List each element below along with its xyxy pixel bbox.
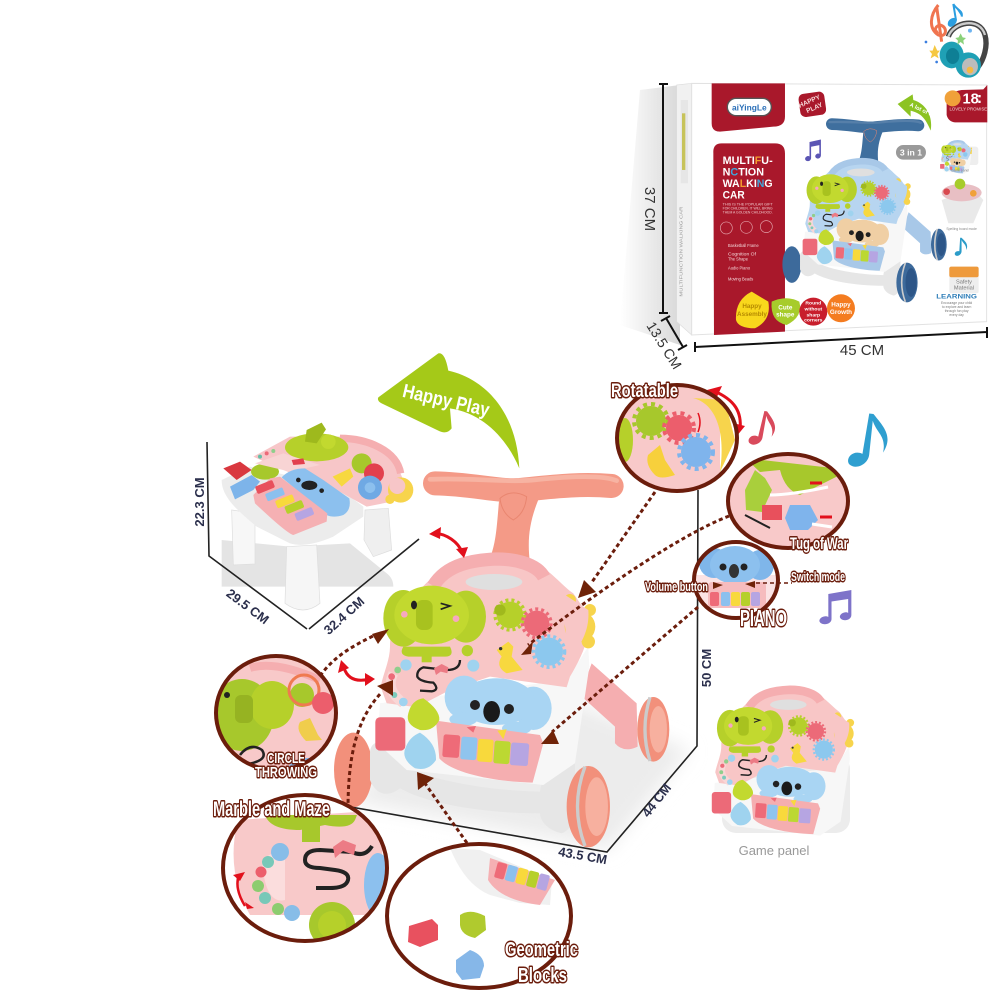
box game panel thumbnail: Game panel [951,168,969,172]
product box [677,83,987,335]
label: 22.3 CM: 22.3 CM [192,477,207,527]
box safety badge: Material [954,286,974,292]
box table thumbnail [942,179,983,231]
box badges [736,292,855,328]
box red top panel [712,83,785,132]
box age badge: LOVELY PROMISE [949,107,987,112]
box red side panel [713,143,785,335]
box logo: aiYingLe [732,104,767,113]
box happy play tag: HAPPY [798,94,822,110]
label: 37 CM: 37 CM [641,187,658,231]
icon: red music note [748,409,778,448]
label: Switch mode: Switch mode [791,569,845,584]
label: Rotatable: Rotatable [611,381,678,402]
box happy play tag: PLAY [805,101,824,115]
box dimension lines [659,84,987,352]
box small copy: FOR CHILDREN. IT WILL BRING [723,205,773,210]
box badges: Round [805,301,821,307]
box badges: corners [804,318,823,324]
box age badge [945,85,987,122]
label: Geometric Blocks: Geometric [505,939,578,961]
play table [222,423,413,610]
detail circle: tug of war [726,452,850,550]
box feature list: Moving Beads [728,277,753,282]
box happy play tag [798,91,827,118]
box learning text: every day [949,313,964,317]
icon: blue music note [847,412,890,470]
label: 29.5 CM: 29.5 CM [224,586,272,627]
box badges: Happy [742,303,762,310]
happy play green arrow: Happy Play [401,381,492,421]
arrowheads [372,580,596,790]
label: CIRCLE THROWING: THROWING [255,764,317,781]
box title: CAR [723,190,745,202]
label: CIRCLE THROWING [255,750,317,781]
label: CIRCLE THROWING: CIRCLE [267,750,305,767]
detail circle: geometric blocks [385,843,575,993]
box feature icons [720,221,772,234]
box feature list: The Shape [728,256,749,261]
box feature list: Basketball Frame [728,243,759,248]
volume and switch pointers [713,581,792,589]
box title: MULTIFU- [723,155,773,167]
box safety badge: Safety [956,280,972,286]
dashed leader lines [320,492,729,843]
detail circle: piano [690,540,785,620]
table dimension lines [207,442,419,629]
happy play green arrow [378,353,519,468]
box age badge: 18 [962,91,979,107]
box badges: Cute [778,304,793,311]
box learning text: to explore and learn [942,305,971,309]
music headphones icon [925,4,986,78]
box blue note [955,238,967,256]
box badges: Happy [831,302,851,309]
label: 13.5 CM: 13.5 CM [643,319,685,372]
label: Tug of War: Tug of War [790,534,848,553]
label: 32.4 CM: 32.4 CM [321,594,367,638]
box learning text: LEARNING [936,294,977,301]
label: 45 CM: 45 CM [840,342,884,359]
box table thumbnail: Spelling board mode [946,227,977,231]
box 3 in 1 badge: 3 in 1 [900,147,922,157]
box feature list: Cognition Of [728,252,757,257]
box title [723,155,773,202]
icon: purple music note [819,590,851,624]
detail circle: rotatable [615,383,739,493]
box feature list: Audio Piano [728,265,751,270]
box title: WALKING [723,178,773,190]
box badges: Growth [830,309,852,316]
box learning text [936,294,977,317]
box safety badge [949,267,979,293]
game panel inset [712,689,854,836]
box green arrow [898,94,938,131]
product box: MULTIFUNCTION WALKING CAR [679,207,684,297]
box logo [727,98,771,116]
label: Marble and Maze: Marble and Maze [213,798,330,821]
detail circle: marble and maze [220,790,392,948]
label: 43.5 CM: 43.5 CM [557,844,608,867]
label: Geometric Blocks [505,939,578,987]
box learning text: through fun play [945,309,969,313]
box 3 in 1 badge [896,145,926,160]
box small copy [723,201,773,214]
label: 44 CM: 44 CM [639,781,674,820]
box feature list [728,243,759,282]
walker dimension lines [345,490,698,852]
caption: Game panel: Game panel [739,843,810,858]
box green arrow: A lot of fun [908,102,938,121]
label: 50 CM: 50 CM [699,649,714,687]
box small copy: THIS IS THE POPULAR GIFT [723,201,773,206]
main walker toy [334,477,669,847]
box learning text: Encourage your child [941,301,972,305]
box badges: without [803,307,823,313]
label: Geometric Blocks: Blocks [518,965,567,987]
detail circle: circle throwing [214,654,338,772]
box game panel thumbnail [940,141,978,174]
label: PIANO: PIANO [740,605,787,631]
box badges: Assembly [737,311,767,318]
label: Volume button: Volume button [645,579,708,594]
box title: NCTION [723,167,764,179]
box small copy: THEM A GOLDEN CHILDHOOD. [723,209,773,214]
box badges: shape [776,312,795,319]
walker floor shadow [345,700,690,850]
box purple note [805,139,821,161]
box badges: sharp [807,312,820,318]
red rotation arrows [344,391,740,680]
red arrow heads [338,386,745,686]
box shadow [620,85,680,345]
box walker image [782,121,947,302]
